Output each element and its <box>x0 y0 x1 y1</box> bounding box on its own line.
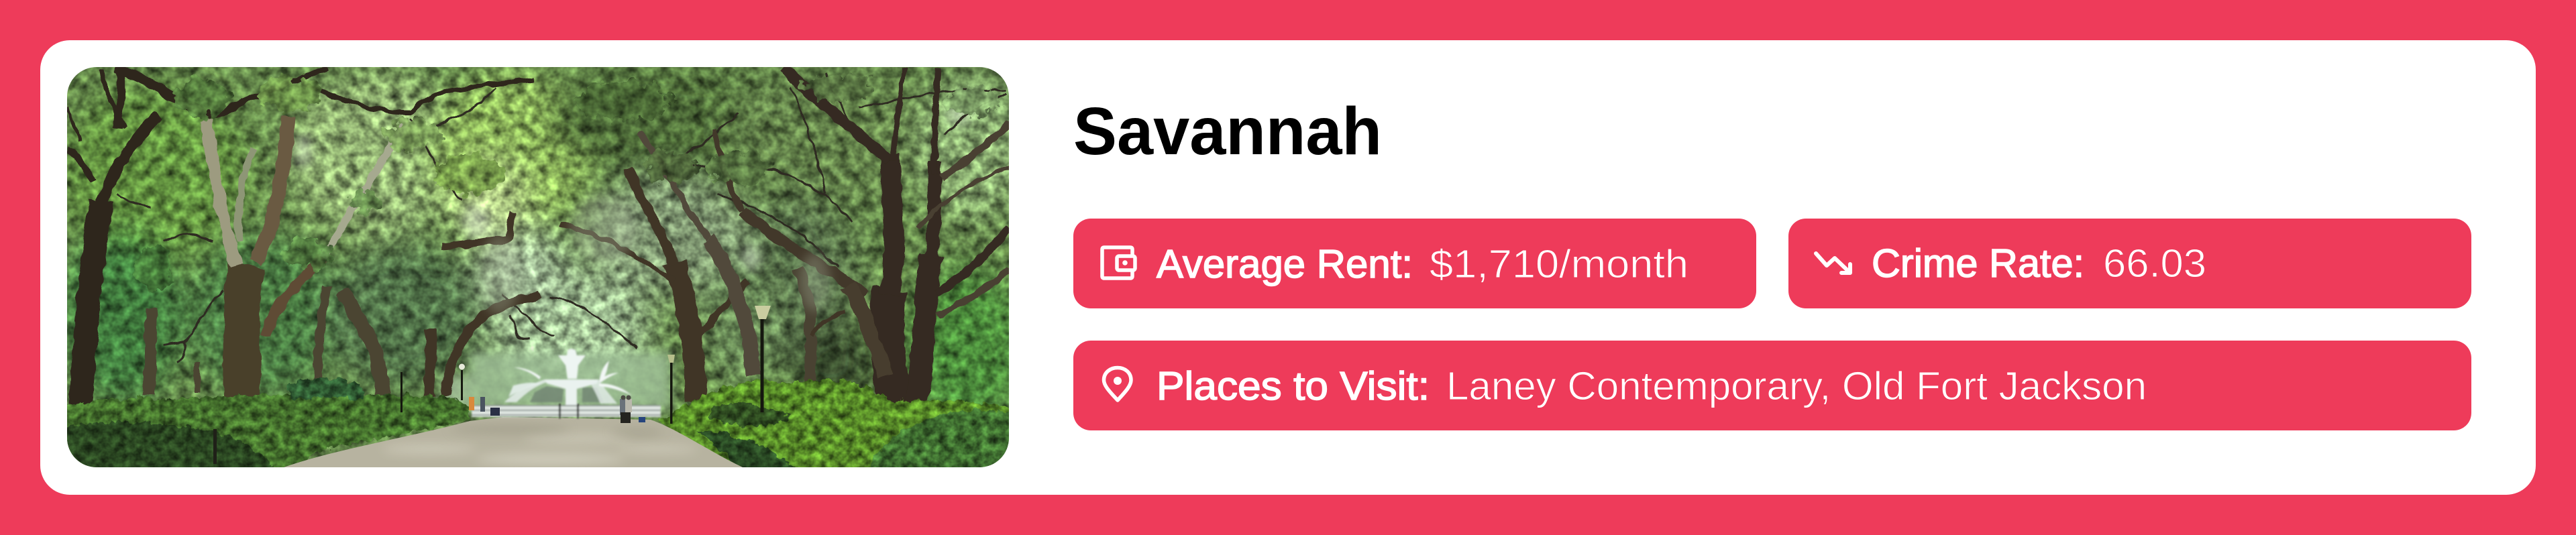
label: places to visit: Places to Visit: <box>1157 364 1430 408</box>
title: Savannah <box>1073 94 1382 169</box>
light sky gaps <box>295 103 971 270</box>
icon: wallet <box>1102 247 1135 278</box>
distant soft background around fountain <box>443 352 671 409</box>
foliage clumps over the limbs <box>136 74 1000 291</box>
photo: tree-lined path and fountain in Forsyth Park <box>60 67 1026 474</box>
stat chip: average rent <box>1073 219 1756 308</box>
value: rent: $1,710/month <box>1430 242 1688 286</box>
mid-distance oaks <box>429 133 845 402</box>
lamp posts <box>213 306 771 464</box>
fountain <box>472 349 661 418</box>
shrubs <box>60 378 1016 474</box>
label: average rent: Average Rent: <box>1157 242 1413 286</box>
visitors <box>469 396 645 423</box>
value: crime rate: 66.03 <box>2103 241 2206 286</box>
left oak <box>67 70 158 416</box>
centre oak with pale limbs <box>207 117 406 402</box>
path <box>284 417 743 467</box>
stat chip: places to visit <box>1073 341 2471 430</box>
value: places: Laney Contemporary, Old Fort Jackson <box>1446 364 2147 408</box>
tree trunks and limbs <box>67 68 1009 429</box>
stat chip: crime rate <box>1788 219 2471 308</box>
large foreground oak, right <box>715 68 1009 429</box>
top canopy limbs <box>116 68 534 116</box>
background trees <box>149 285 384 397</box>
hanging Spanish moss <box>480 194 830 315</box>
thin branches <box>117 74 1006 362</box>
icon: downward trend <box>1816 253 1850 273</box>
label: crime rate: Crime Rate: <box>1872 241 2084 286</box>
icon: map pin <box>1104 367 1131 400</box>
